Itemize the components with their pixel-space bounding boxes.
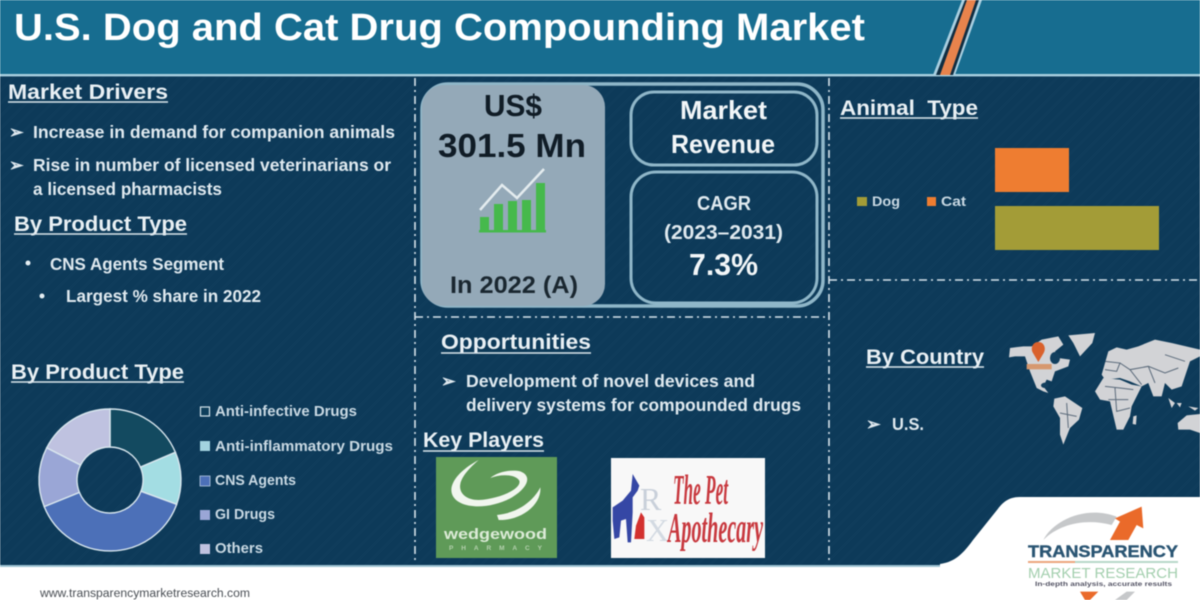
driver 2: ➢	[9, 155, 25, 175]
opportunity item: delivery systems for compounded drugs	[466, 395, 801, 415]
header band	[0, 0, 1200, 76]
country item	[866, 414, 924, 434]
heading: by country: By Country	[866, 345, 984, 369]
logo: wedgewood pharmacy: PHARMACY	[449, 545, 543, 552]
panel: market drivers	[8, 80, 395, 199]
logo: transparency market research: TRANSPARENCY	[1028, 542, 1179, 561]
heading: animal type: Animal Type	[840, 96, 978, 120]
chart legend	[857, 193, 966, 209]
icon: growth chart	[479, 169, 546, 232]
cagr card: 7.3%	[689, 247, 758, 282]
title: U.S. Dog and Cat Drug Compounding Market	[14, 7, 865, 49]
driver 1: ➢	[9, 122, 25, 142]
logo: wedgewood pharmacy: wedgewood	[443, 526, 547, 543]
world map	[1009, 333, 1200, 445]
currency label: US$	[484, 88, 542, 123]
panel: product type chart	[11, 360, 393, 557]
logo: transparency market research	[1028, 507, 1179, 600]
bar chart	[995, 148, 1159, 250]
chart legend: Dog	[872, 193, 900, 209]
market revenue label: Revenue	[671, 129, 775, 159]
header slash accent	[933, 0, 982, 75]
country item: U.S.	[892, 414, 924, 434]
heading: market drivers: Market Drivers	[8, 80, 168, 104]
market revenue label: Market	[680, 95, 767, 125]
panel: by country	[866, 333, 1200, 445]
cagr card: CAGR	[697, 193, 752, 215]
panel dividers	[415, 78, 1200, 562]
logo: transparency market research: In-depth analysis, accurate results	[1035, 581, 1172, 588]
revenue value card	[422, 85, 605, 306]
panel: leading product type	[14, 212, 261, 306]
outer frame	[422, 84, 823, 306]
panel: key players	[423, 428, 765, 558]
logo backdrop curve	[940, 497, 1200, 600]
logo: transparency market research: MARKET RESEARCH	[1028, 565, 1178, 582]
chart legend	[200, 403, 393, 557]
driver 2: a licensed pharmacists	[33, 179, 222, 199]
cagr card: (2023–2031)	[664, 222, 783, 244]
logo: wedgewood pharmacy	[436, 457, 557, 558]
footer white band	[0, 565, 1200, 600]
panel: animal type	[840, 96, 1159, 250]
logo: the pet apothecary: R	[640, 481, 662, 517]
driver 2: Rise in number of licensed veterinarians or	[33, 155, 391, 175]
donut chart	[39, 409, 181, 551]
text: Apothecary	[667, 506, 763, 552]
share bullet: Largest % share in 2022	[66, 286, 261, 306]
legend: cns agents: CNS Agents	[215, 472, 296, 489]
heading: by product type chart: By Product Type	[11, 360, 184, 384]
segment bullet: CNS Agents Segment	[50, 254, 224, 274]
opportunity item: ➢	[441, 371, 457, 391]
country item: ➢	[866, 414, 882, 434]
year label: In 2022 (A)	[450, 272, 578, 299]
cagr card	[631, 172, 817, 303]
driver 1: Increase in demand for companion animals	[33, 122, 395, 142]
legend: anti-inflammatory: Anti-inflammatory Drugs	[215, 438, 393, 455]
heading: key players: Key Players	[423, 428, 544, 452]
opportunity item	[441, 371, 801, 415]
chart legend: Cat	[941, 193, 966, 209]
panel: market revenue	[422, 84, 823, 306]
footer url: www.transparencymarketresearch.com	[39, 588, 250, 600]
opportunity item: Development of novel devices and	[466, 371, 755, 391]
driver 2	[9, 155, 391, 199]
panel: opportunities	[441, 330, 801, 415]
logo: the pet apothecary	[611, 458, 765, 558]
legend: anti-infective: Anti-infective Drugs	[215, 403, 357, 420]
heading: opportunities: Opportunities	[441, 330, 591, 354]
market revenue label	[631, 92, 817, 165]
legend: others: Others	[215, 540, 263, 557]
icon: logo arrow	[1043, 507, 1143, 600]
revenue amount: 301.5 Mn	[438, 127, 586, 164]
logo: the pet apothecary: The Pet	[673, 468, 729, 514]
dark sea and border detail	[1060, 355, 1185, 428]
legend: gi drugs: GI Drugs	[215, 506, 275, 523]
heading: by product type: By Product Type	[14, 212, 187, 236]
logo: the pet apothecary: X	[646, 512, 669, 548]
